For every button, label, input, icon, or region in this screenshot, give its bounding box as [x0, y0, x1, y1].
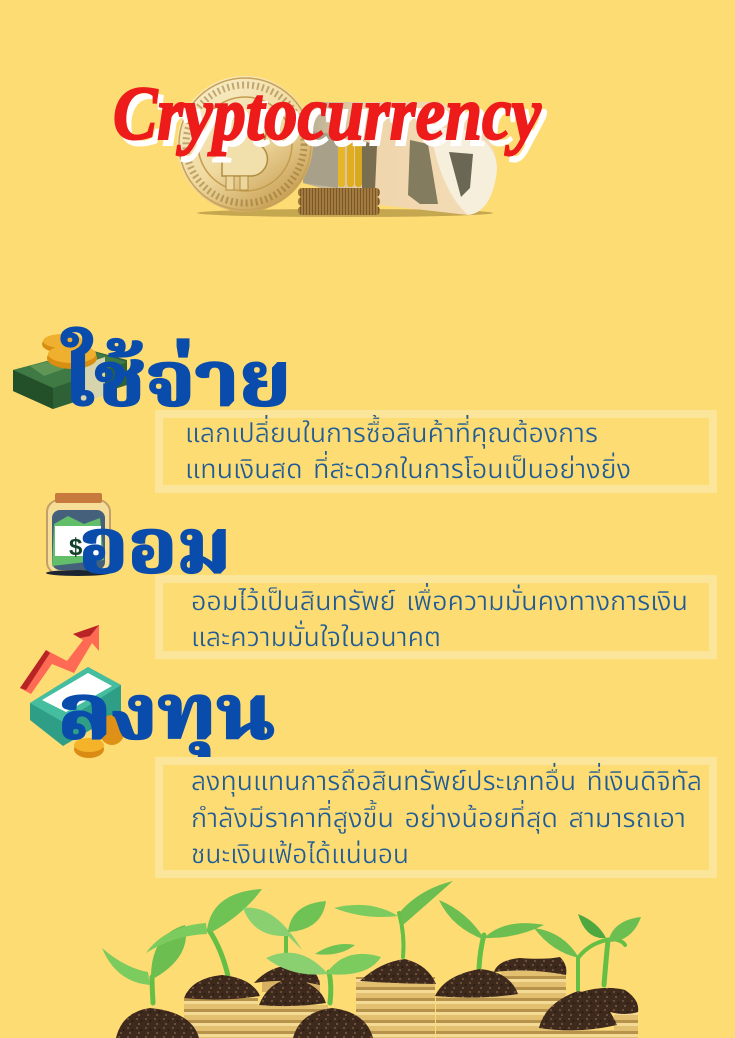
back soil: [254, 957, 566, 985]
image: bitcoin coin and rolled banknotes: [177, 76, 497, 217]
text: spending description: แลกเปลี่ยนในการซื้อสินค้าที่คุณต้องการ: [185, 414, 598, 449]
text: investing description: กำลังมีราคาที่สูงขึ้น อย่างน้อยที่สุด สามารถเอา: [191, 799, 686, 834]
text: saving description: และความมั่นใจในอนาคต: [191, 620, 441, 652]
text: spending description: [185, 414, 631, 484]
image: seedlings growing on coin stacks: [102, 881, 641, 1038]
coin stack: [298, 188, 380, 215]
text: spending description: แทนเงินสด ที่สะดวกในการโอนเป็นอย่างยิ่ง: [185, 450, 631, 484]
icon: rising arrow with cash: [20, 625, 125, 758]
icon: savings jar: [46, 493, 110, 576]
text: saving description: [191, 582, 688, 652]
panel: spending: [159, 414, 713, 489]
panel: saving: [159, 579, 713, 655]
back coin stacks: [262, 968, 638, 1038]
panel: investing: [159, 761, 713, 874]
text: saving description: ออมไว้เป็นสินทรัพย์ เพื่อความมั่นคงทางการเงิน: [191, 582, 688, 616]
heading: saving: ออม: [79, 505, 231, 589]
front coin stacks: [184, 977, 617, 1038]
soil mounds: [116, 959, 638, 1038]
title: Cryptocurrency: [118, 78, 546, 162]
text: investing description: ลงทุนแทนการถือสินทรัพย์ประเภทอื่น ที่เงินดิจิทัล: [191, 762, 702, 797]
title: Cryptocurrency: [113, 72, 541, 156]
icon: cash and coins: [13, 334, 127, 409]
icon: savings jar: $: [69, 534, 83, 561]
gold coin: [177, 76, 313, 212]
text: investing description: [191, 762, 702, 869]
heading: spending: ใช้จ่าย: [61, 327, 291, 422]
text: investing description: ชนะเงินเฟ้อได้แน่นอน: [191, 839, 409, 869]
leaves: [102, 881, 641, 985]
stems: [152, 913, 625, 1003]
heading: investing: ลงทุน: [58, 671, 275, 761]
banknote roll: [303, 102, 497, 215]
